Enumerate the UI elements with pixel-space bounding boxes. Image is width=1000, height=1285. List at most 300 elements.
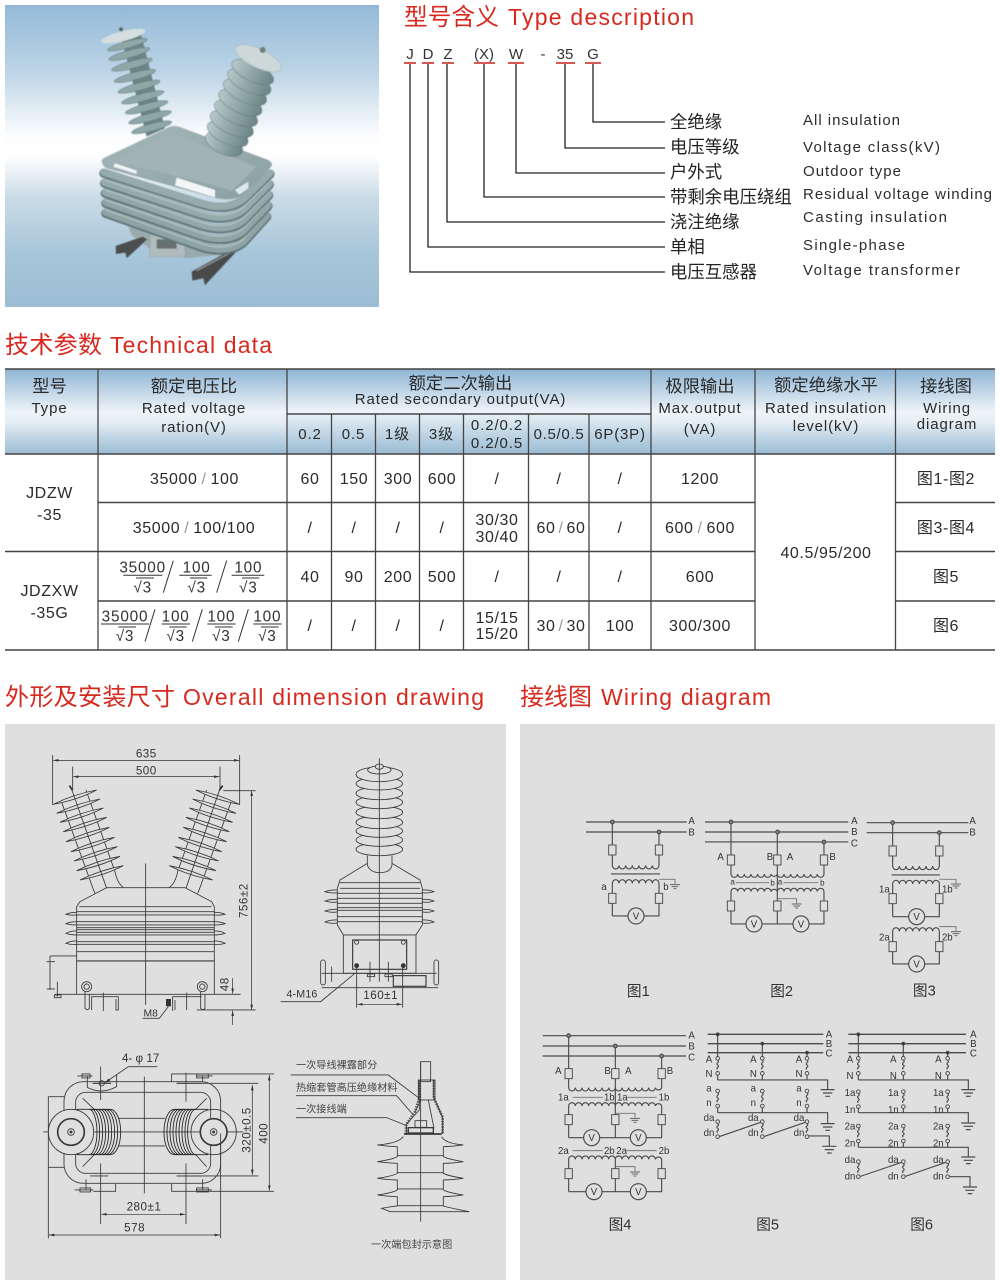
M8 callout	[143, 999, 171, 1019]
English meaning labels	[803, 112, 992, 279]
terminal labels	[601, 882, 669, 922]
row 1: 1200	[681, 471, 719, 488]
voltage ratio fractions: 100	[207, 609, 235, 626]
dimension 500: 500	[136, 764, 157, 777]
terminal labels: 1a	[879, 885, 890, 896]
terminal labels: 1b	[604, 1093, 615, 1104]
terminal labels: A	[750, 1054, 757, 1065]
terminal labels: 1a	[888, 1088, 899, 1099]
voltage ratio fractions	[101, 559, 282, 645]
terminal labels: B	[767, 852, 773, 863]
bus labels: A	[688, 816, 695, 827]
terminal labels: C	[851, 839, 858, 850]
header text: diagram	[917, 416, 977, 433]
detail annotation labels: 一次导线裸露部分	[296, 1058, 377, 1071]
model code letters: J	[406, 46, 414, 63]
terminal labels: V	[635, 1187, 642, 1198]
English meaning labels: Outdoor type	[803, 163, 901, 180]
terminal labels: dn	[704, 1128, 714, 1139]
terminal labels: dn	[933, 1172, 944, 1183]
left insulator sheds	[53, 790, 123, 880]
figure 5	[704, 1029, 836, 1233]
dimension 320±0.5	[240, 1085, 253, 1175]
insulator core lines	[62, 790, 231, 893]
wiring	[729, 820, 826, 932]
plan outline	[43, 1067, 243, 1224]
terminal labels: C	[688, 1053, 695, 1064]
detail annotation labels: 一次接线端	[296, 1103, 347, 1116]
heading: technical data	[5, 332, 272, 359]
terminal labels: C	[825, 1048, 832, 1059]
terminal labels: a	[751, 1083, 757, 1094]
header text: Rated voltage	[142, 400, 246, 417]
terminal labels: A	[688, 1030, 695, 1041]
terminal labels: a	[778, 878, 783, 887]
terminal labels: 2n	[845, 1138, 855, 1149]
terminal labels: B	[604, 1066, 611, 1077]
row 3	[300, 569, 959, 586]
terminal labels: n	[796, 1098, 802, 1109]
terminal labels	[555, 1030, 695, 1198]
voltage ratio fractions: 100	[183, 559, 211, 576]
model names: -35	[37, 507, 62, 524]
header text: 极限输出	[665, 376, 735, 396]
heading: overall dimension drawing: 外形及安装尺寸	[5, 684, 175, 711]
row 1: /	[617, 471, 623, 488]
4-φ17 callout: 4- φ 17	[122, 1052, 159, 1065]
terminal labels: n	[751, 1098, 756, 1109]
dimension 400	[257, 1075, 270, 1191]
row 2: 600/600	[665, 520, 735, 537]
M8 callout: M8	[143, 1008, 158, 1019]
terminal labels: b	[820, 878, 825, 887]
4-φ17 callout	[105, 1052, 159, 1083]
heading: type description: 型号含义	[404, 4, 499, 31]
row 1: 150	[340, 471, 368, 488]
row 3: 200	[384, 569, 412, 586]
left bushing rings	[77, 1109, 121, 1155]
model code letters: G	[587, 46, 599, 63]
model names	[20, 485, 79, 622]
right insulator sheds	[169, 790, 239, 880]
Chinese meaning labels: 带剩余电压绕组	[670, 187, 792, 207]
terminal labels: A	[706, 1054, 713, 1065]
terminal labels: V	[913, 912, 920, 923]
header text: 0.5	[342, 426, 365, 443]
type designation code diagram	[404, 46, 992, 282]
Chinese meaning labels: 户外式	[670, 162, 722, 182]
fuses	[565, 1069, 665, 1179]
terminal labels: V	[751, 919, 758, 930]
row 3: 500	[428, 569, 456, 586]
row 3: /	[617, 569, 623, 586]
row 2: 图3-图4	[917, 520, 975, 537]
panel: dimension drawings	[5, 724, 506, 1280]
terminal labels: 2a	[879, 933, 890, 944]
terminal labels: b	[663, 882, 669, 893]
terminal labels: da	[845, 1155, 856, 1166]
annotation leaders	[291, 1075, 419, 1125]
voltage ratio fractions: √3	[116, 628, 134, 645]
detail annotation labels	[296, 1058, 398, 1116]
voltage ratio fractions: √3	[187, 579, 206, 596]
terminal labels: da	[933, 1155, 944, 1166]
terminal labels: 1n	[933, 1105, 944, 1116]
model code letters: Z	[443, 46, 453, 63]
dimension 500	[73, 764, 220, 790]
row 2: 60/60	[536, 520, 586, 537]
row 1: 图1-图2	[917, 471, 975, 488]
English meaning labels: All insulation	[803, 112, 900, 129]
row 1: 300	[384, 471, 412, 488]
technical data table	[5, 369, 995, 650]
row 1	[150, 471, 975, 488]
wiring	[610, 820, 675, 924]
voltage ratio fractions: 100	[234, 559, 262, 576]
model names: -35G	[31, 605, 68, 622]
terminal labels: N	[795, 1069, 802, 1080]
row 4: 300/300	[669, 618, 731, 635]
terminal labels: A	[787, 852, 794, 863]
terminal labels: N	[706, 1069, 713, 1080]
model names: JDZW	[26, 485, 73, 502]
terminal labels: V	[591, 1187, 598, 1198]
Chinese meaning labels: 全绝缘	[670, 112, 722, 132]
terminal labels: n	[706, 1098, 712, 1109]
mounting feet and base	[116, 227, 236, 285]
English meaning labels: Voltage class(kV)	[803, 139, 940, 156]
row 4: 30/30	[536, 618, 586, 635]
primary terminal encapsulation detail	[291, 1058, 469, 1251]
row 1: /	[494, 471, 500, 488]
header text: 额定绝缘水平	[774, 375, 878, 395]
terminal labels: 1a	[617, 1093, 628, 1104]
transformer body	[55, 863, 241, 1005]
conductor and heat shrink sleeve	[404, 1062, 443, 1134]
Chinese meaning labels	[670, 112, 792, 282]
model code letters: 35	[557, 46, 573, 63]
terminal labels: A	[625, 1066, 632, 1077]
bus labels	[688, 816, 695, 838]
terminal labels: 2b	[942, 933, 953, 944]
leader lines	[410, 64, 665, 272]
dimension 48: 48	[219, 977, 232, 991]
English meaning labels: Single-phase	[803, 237, 905, 254]
detail annotation labels: 热缩套管高压绝缘材料	[296, 1081, 398, 1094]
row 3: /	[556, 569, 562, 586]
4-M16 callout	[281, 973, 355, 1002]
row 2: 30/40	[475, 529, 519, 546]
header text: 额定二次输出	[409, 373, 512, 393]
English meaning labels: Voltage transformer	[803, 262, 960, 279]
row 2: /	[617, 520, 623, 537]
terminal labels: 1a	[558, 1093, 569, 1104]
terminal labels: 1n	[845, 1105, 855, 1116]
terminal labels: N	[935, 1071, 942, 1082]
terminal labels: B	[829, 852, 836, 863]
terminal labels: V	[798, 919, 805, 930]
header text: 0.2	[298, 426, 322, 443]
terminal labels: A	[851, 816, 858, 827]
row 4: 15/15	[475, 610, 519, 627]
busbars and ground rails	[708, 1033, 829, 1146]
table header background	[5, 369, 995, 454]
dimension 160±1: 160±1	[363, 989, 398, 1002]
terminal labels: A	[970, 1029, 977, 1040]
terminal labels: 2a	[558, 1146, 569, 1157]
terminal labels: dn	[748, 1128, 759, 1139]
row 4: 图6	[933, 618, 959, 635]
dimension 160±1	[357, 965, 403, 1008]
row 2: /	[351, 520, 357, 537]
dimension 635: 635	[136, 747, 157, 760]
header text: level(kV)	[793, 418, 859, 435]
header text: 接线图	[920, 376, 972, 396]
insulator sheds section	[377, 1062, 469, 1222]
voltage ratio fractions: √3	[258, 628, 277, 645]
row 1: /	[556, 471, 562, 488]
dimension 756±2	[197, 791, 256, 1010]
terminal labels: V	[635, 1133, 642, 1144]
row 2: /	[307, 520, 313, 537]
front view with dimensions	[47, 747, 256, 1025]
terminal labels: 2a	[888, 1122, 899, 1133]
panel: wiring diagrams	[520, 724, 995, 1280]
row 2	[133, 512, 975, 546]
terminal labels: a	[706, 1083, 712, 1094]
insulator axes	[69, 786, 223, 888]
terminal labels: B	[970, 1039, 977, 1050]
terminal labels: C	[970, 1048, 977, 1059]
model code letters: D	[423, 46, 434, 63]
row 3: 图5	[933, 569, 959, 586]
insulation level merged cell: 40.5/95/200	[780, 545, 872, 562]
terminal labels: 2n	[933, 1138, 944, 1149]
terminal labels: 2a	[933, 1122, 944, 1133]
terminal labels: B	[826, 1039, 832, 1050]
figure 1 caption: 图1	[627, 984, 650, 1000]
terminal labels: V	[633, 911, 640, 922]
model code letters: -	[540, 46, 546, 63]
row 4: /	[351, 618, 357, 635]
header text: 0.5/0.5	[534, 426, 584, 443]
dimension 280±1	[101, 1201, 185, 1214]
terminal labels: 1a	[933, 1088, 944, 1099]
terminal labels: V	[913, 959, 920, 970]
row 3: 40	[300, 569, 320, 586]
terminal labels: B	[969, 827, 976, 838]
right bushing rings	[164, 1109, 208, 1155]
ground symbols	[961, 1090, 977, 1194]
product photo: transformer on blue gradient	[5, 5, 379, 307]
fuses	[889, 846, 961, 952]
terminal labels	[879, 816, 976, 970]
English meaning labels: Casting insulation	[803, 209, 947, 226]
voltage ratio fractions: 35000	[119, 559, 166, 576]
terminal labels: A	[935, 1054, 942, 1065]
row 3: /	[494, 569, 500, 586]
figure 3 caption: 图3	[913, 983, 936, 999]
fuses	[727, 855, 828, 911]
header text: 额定电压比	[151, 376, 237, 396]
heading: overall dimension drawing	[5, 684, 484, 711]
terminal labels: dn	[794, 1128, 804, 1139]
terminal labels: 1n	[888, 1105, 899, 1116]
Chinese meaning labels: 电压等级	[670, 137, 740, 157]
header text: 3级	[429, 426, 454, 443]
terminal labels: A	[555, 1066, 562, 1077]
insulator sheds	[356, 764, 403, 856]
terminal labels: a	[796, 1083, 802, 1094]
terminal labels: dn	[845, 1172, 855, 1183]
terminal labels: A	[826, 1029, 833, 1040]
terminal labels: A	[796, 1054, 803, 1065]
figure 3	[867, 816, 976, 999]
terminal labels: V	[588, 1133, 595, 1144]
figure 4 caption: 图4	[609, 1217, 631, 1233]
figure 6 caption: 图6	[910, 1217, 933, 1233]
body cooling fins	[104, 172, 270, 250]
lifting lugs, brackets and feet	[47, 956, 207, 1011]
header text: 0.2/0.5	[471, 435, 523, 452]
code underlines	[404, 62, 601, 64]
terminal labels: a	[601, 882, 607, 893]
busbars and ground rails	[848, 1033, 970, 1187]
terminal labels: 2a	[845, 1122, 856, 1133]
terminal labels	[704, 1029, 833, 1139]
terminal labels: da	[748, 1113, 759, 1124]
header text: 1级	[385, 426, 410, 443]
terminal labels: B	[688, 1041, 695, 1052]
dimension 48	[219, 977, 233, 1025]
model names: JDZXW	[20, 583, 79, 600]
row 2: /	[395, 520, 401, 537]
header text: Wiring	[923, 400, 971, 417]
row 1: 60	[300, 471, 320, 488]
English meaning labels: Residual voltage winding	[803, 186, 992, 203]
terminal labels: A	[890, 1054, 897, 1065]
row 3: 600	[686, 569, 714, 586]
dimension 320±0.5: 320±0.5	[240, 1107, 253, 1153]
wiring	[567, 1034, 663, 1200]
terminal labels: 1a	[845, 1088, 856, 1099]
plan view with dimensions	[43, 1052, 274, 1238]
busbars	[586, 822, 687, 832]
heading: wiring diagram: 接线图	[520, 684, 592, 711]
terminal labels: 2b	[659, 1146, 669, 1157]
terminal labels: B	[851, 827, 858, 838]
terminal labels: da	[888, 1155, 899, 1166]
header text: ration(V)	[161, 419, 227, 436]
voltage ratio fractions: √3	[133, 579, 152, 596]
terminals	[856, 1056, 949, 1178]
row 1: 35000/100	[150, 471, 239, 488]
row 2: 35000/100/100	[133, 520, 255, 537]
right insulator	[202, 39, 285, 161]
heading: wiring diagram	[520, 684, 771, 711]
busbars	[705, 822, 848, 842]
model code letters	[406, 46, 599, 63]
terminal labels: N	[847, 1071, 854, 1082]
model code letters: W	[509, 46, 524, 63]
row 4: /	[439, 618, 445, 635]
dimension 280±1: 280±1	[127, 1201, 161, 1214]
neck and body	[325, 856, 434, 935]
Chinese meaning labels: 浇注绝缘	[670, 212, 740, 232]
voltage ratio fractions: √3	[166, 628, 185, 645]
model code letters: (X)	[474, 46, 494, 63]
bus labels: B	[688, 827, 695, 838]
terminal labels: a	[730, 878, 735, 887]
busbars	[867, 823, 968, 833]
row 1: 600	[428, 471, 456, 488]
terminal labels: 1b	[659, 1093, 669, 1104]
terminal labels: N	[750, 1069, 757, 1080]
heading: technical data: 技术参数	[5, 332, 102, 359]
terminal labels: A	[847, 1054, 854, 1065]
left insulator	[100, 26, 173, 137]
dimension 400: 400	[257, 1123, 270, 1144]
row 4: 15/20	[475, 626, 519, 643]
voltage ratio fractions: 35000	[102, 609, 148, 626]
row 4: /	[395, 618, 401, 635]
dimension 635	[53, 747, 240, 805]
heading: technical data: Technical data	[110, 332, 272, 358]
heading: type description	[404, 4, 694, 31]
Chinese meaning labels: 单相	[670, 237, 705, 257]
mounting feet	[75, 1074, 213, 1192]
header text: Type	[31, 400, 68, 417]
terminal labels: A	[717, 852, 724, 863]
ground symbols	[821, 1090, 836, 1153]
heading: wiring diagram: Wiring diagram	[601, 684, 771, 710]
dimension 756±2: 756±2	[237, 883, 250, 918]
terminal labels: 2a	[616, 1146, 628, 1157]
heading: overall dimension drawing: Overall dimension drawing	[183, 684, 484, 710]
header text: Rated secondary output(VA)	[355, 391, 566, 408]
figure 1	[586, 816, 695, 1000]
bushing caps	[48, 1109, 236, 1155]
table grid	[5, 369, 995, 650]
figure 4	[543, 1030, 695, 1233]
figure 6	[845, 1029, 977, 1233]
row 2: 30/30	[475, 512, 519, 529]
header text: 型号	[32, 376, 67, 396]
row 4	[307, 610, 959, 643]
figure 2	[705, 816, 858, 1000]
wiring	[891, 821, 956, 972]
fuses	[609, 845, 680, 903]
voltage ratio fractions: 100	[162, 609, 190, 626]
terminal labels: 1b	[942, 885, 953, 896]
heading: type description: Type description	[508, 4, 694, 30]
figure 5 caption: 图5	[756, 1217, 779, 1233]
row 3: 90	[344, 569, 364, 586]
voltage ratio fractions: 100	[253, 609, 281, 626]
terminal labels	[717, 816, 858, 930]
row 4: /	[307, 618, 313, 635]
row 2: /	[439, 520, 445, 537]
busbars	[543, 1036, 686, 1056]
bracket and extension lines	[48, 1074, 274, 1238]
voltage ratio fractions: √3	[239, 579, 258, 596]
dimension 578: 578	[124, 1221, 145, 1234]
Chinese meaning labels: 电压互感器	[670, 262, 757, 282]
terminal labels: da	[794, 1113, 805, 1124]
terminal labels	[845, 1029, 977, 1183]
header text: 0.2/0.2	[471, 417, 523, 434]
header text: 6P(3P)	[594, 426, 646, 443]
